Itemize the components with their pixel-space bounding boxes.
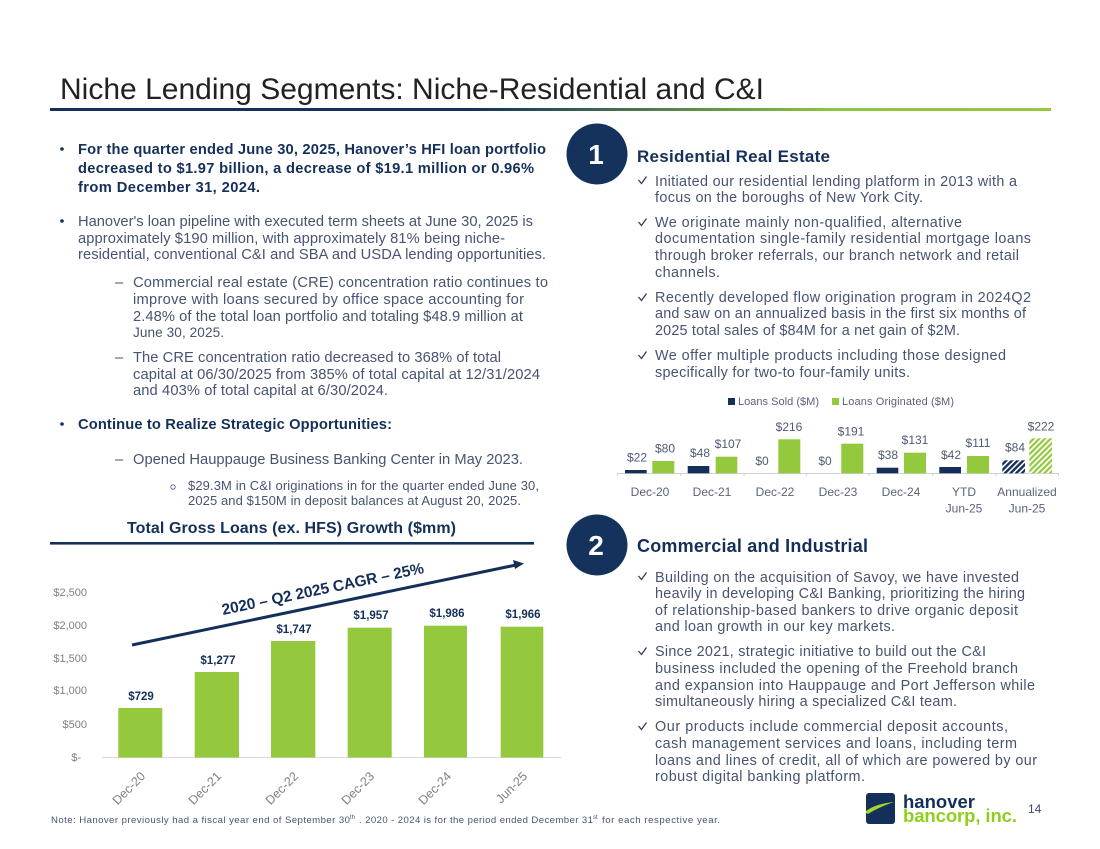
panel: left text bbox=[60, 142, 548, 508]
bar value labels: $216 bbox=[776, 420, 803, 434]
sub-bullet: CRE ratio: and 403% of total capital at 6/30/2024. bbox=[133, 383, 388, 399]
panel: commercial and industrial bbox=[566, 514, 1037, 785]
bar value labels: $38 bbox=[878, 448, 898, 462]
value labels: $1,277 bbox=[200, 655, 236, 667]
check item: products: We offer multiple products including those designed bbox=[655, 348, 1006, 364]
heading: Commercial and Industrial bbox=[637, 536, 868, 556]
check item: since 2021: Since 2021, strategic initiative to build out the C&I bbox=[655, 644, 986, 660]
check item: platform: Initiated our residential lending platform in 2013 with a bbox=[655, 174, 1017, 190]
check item: since 2021: and expansion into Hauppauge and Port Jefferson while bbox=[655, 678, 1035, 694]
sub-bullet: CRE ratio: The CRE concentration ratio decreased to 368% of total bbox=[133, 350, 501, 366]
sub-bullet: CRE office: June 30, 2025. bbox=[133, 325, 224, 340]
sub-bullet: CRE ratio bbox=[115, 350, 540, 399]
check item: platform: focus on the boroughs of New York City. bbox=[655, 190, 923, 206]
legend: Loans Sold ($M) bbox=[738, 396, 819, 408]
category labels bbox=[631, 485, 1057, 516]
check item: originate: channels. bbox=[655, 265, 720, 281]
sub-bullet: CRE office: 2.48% of the total loan portfolio and totaling $48.9 million at bbox=[133, 309, 523, 325]
sub-bullet: CRE office: – bbox=[115, 275, 124, 291]
y axis labels: $- bbox=[71, 752, 81, 764]
bar chart: loans sold and originated bbox=[617, 396, 1059, 516]
x axis labels: Jun-25 bbox=[493, 769, 530, 806]
bullet: strategic opportunities: Continue to Realize Strategic Opportunities: bbox=[78, 417, 392, 433]
category labels: Dec-22 bbox=[756, 485, 795, 499]
bar value labels: $222 bbox=[1028, 419, 1055, 433]
bar value labels: $0 bbox=[755, 454, 769, 468]
x axis labels: Dec-24 bbox=[416, 769, 454, 808]
sub-bullet: CRE office: Commercial real estate (CRE) concentration ratio continues to bbox=[133, 275, 548, 291]
y axis labels: $2,000 bbox=[53, 620, 87, 632]
category labels: Jun-25 bbox=[1009, 502, 1046, 516]
check item: products: Our products include commercial deposit accounts, bbox=[655, 719, 1008, 735]
check item: since 2021: business included the opening of the Freehold branch bbox=[655, 661, 1018, 677]
footnote: th bbox=[350, 815, 355, 821]
bar value labels: $191 bbox=[838, 425, 865, 439]
value labels: $1,747 bbox=[276, 624, 312, 636]
y axis labels: $1,500 bbox=[53, 653, 87, 665]
bullet: loan pipeline: approximately $190 million, with approximately 81% being niche- bbox=[78, 231, 505, 247]
loans originated bars bbox=[652, 438, 1052, 473]
x axis labels bbox=[110, 769, 530, 808]
footnote: . 2020 - 2024 is for the period ended December 31 bbox=[359, 815, 593, 826]
bullet: loan pipeline: Hanover's loan pipeline with executed term sheets at June 30, 2025 is bbox=[78, 214, 533, 230]
check item: flow origination bbox=[638, 290, 1031, 339]
legend: Loans Originated ($M) bbox=[842, 396, 954, 408]
sub-bullet: Hauppauge: Opened Hauppauge Business Banking Center in May 2023. bbox=[133, 452, 523, 468]
y axis labels: $500 bbox=[63, 719, 87, 731]
bullet: HFI loan portfolio: from December 31, 2024. bbox=[78, 180, 260, 196]
number badge 1 bbox=[566, 124, 628, 184]
bar value labels: $80 bbox=[655, 442, 675, 456]
check item: products: specifically for two-to four-family units. bbox=[655, 365, 910, 381]
bar chart: total gross loans bbox=[53, 560, 561, 808]
category labels: Dec-20 bbox=[631, 485, 670, 499]
logo: hanover bancorp: bancorp, inc. bbox=[903, 805, 1017, 826]
check item: Savoy: and loan growth in our key markets. bbox=[655, 619, 895, 635]
arrow: CAGR trend bbox=[132, 560, 524, 645]
check item: flow origination: 2025 total sales of $84M for a net gain of $2M. bbox=[655, 323, 960, 339]
number badge 2: 2 bbox=[588, 530, 604, 561]
check item: products: cash management services and loans, including term bbox=[655, 736, 1017, 752]
value labels: $729 bbox=[128, 691, 154, 703]
bar value labels: $84 bbox=[1005, 441, 1025, 455]
logo: hanover bancorp: hanover bbox=[903, 791, 975, 812]
bar value labels: $22 bbox=[627, 451, 647, 465]
x axis labels: Dec-21 bbox=[186, 769, 224, 808]
bar value labels: $131 bbox=[902, 433, 929, 447]
x axis labels: Dec-22 bbox=[263, 769, 301, 808]
check item: originate bbox=[638, 215, 1031, 281]
sub-bullet: Hauppauge: – bbox=[115, 452, 124, 468]
x axis labels: Dec-20 bbox=[110, 769, 148, 808]
footnote: for each respective year. bbox=[602, 815, 720, 826]
sub-sub-bullet: originations bbox=[171, 478, 539, 508]
check item: flow origination: Recently developed flow origination program in 2024Q2 bbox=[655, 290, 1031, 306]
check item: originate: documentation single-family residential mortgage loans bbox=[655, 231, 1031, 247]
check item: Savoy: of relationship-based bankers to drive organic deposit bbox=[655, 603, 1018, 619]
sub-bullet: CRE office: improve with loans secured by office space accounting for bbox=[133, 292, 524, 308]
number badge 2 bbox=[566, 514, 628, 576]
bar value labels: $0 bbox=[818, 454, 832, 468]
sub-bullet: CRE office bbox=[115, 275, 548, 340]
footnote: Note: Hanover previously had a fiscal year end of September 30 bbox=[51, 815, 350, 826]
value labels: $1,986 bbox=[429, 608, 465, 620]
x axis labels: Dec-23 bbox=[339, 769, 377, 808]
bullet: loan pipeline bbox=[60, 214, 546, 263]
category labels: Dec-21 bbox=[693, 485, 732, 499]
check item: originate: through broker referrals, our branch network and retail bbox=[655, 248, 1019, 264]
check item: products bbox=[638, 348, 1006, 381]
bar value labels bbox=[627, 419, 1055, 468]
bullet: loan pipeline: residential, conventional C&I and SBA and USDA lending opportunities. bbox=[78, 247, 546, 263]
number badge 1: 1 bbox=[588, 139, 604, 170]
bar value labels: $107 bbox=[715, 437, 742, 451]
title: Niche Lending Segments: Niche-Residential and C&I bbox=[60, 73, 764, 106]
bar value labels: $42 bbox=[941, 448, 961, 462]
bullet: HFI loan portfolio: For the quarter ended June 30, 2025, Hanover’s HFI loan portfolio bbox=[78, 142, 546, 158]
check item: Savoy: heavily in developing C&I Banking, prioritizing the hiring bbox=[655, 586, 1025, 602]
title rule bbox=[50, 108, 1051, 111]
check item: products bbox=[638, 719, 1037, 785]
check item: since 2021: simultaneously hiring a specialized C&I team. bbox=[655, 694, 957, 710]
bullet: HFI loan portfolio bbox=[60, 142, 546, 196]
heading: Residential Real Estate bbox=[637, 147, 830, 166]
bars bbox=[118, 626, 543, 758]
category labels: Dec-24 bbox=[882, 485, 921, 499]
check item: flow origination: and saw on an annualized basis in the first six months of bbox=[655, 306, 1027, 322]
y axis labels bbox=[53, 587, 87, 764]
check item: platform bbox=[638, 174, 1017, 206]
category labels: Annualized bbox=[997, 485, 1057, 499]
check item: Savoy: Building on the acquisition of Savoy, we have invested bbox=[655, 570, 1019, 586]
sub-bullet: CRE ratio: capital at 06/30/2025 from 385% of total capital at 12/31/2024 bbox=[133, 367, 540, 383]
y axis labels: $1,000 bbox=[53, 685, 87, 697]
sub-sub-bullet: originations: 2025 and $150M in deposit balances at August 20, 2025. bbox=[188, 493, 521, 508]
check item: products: robust digital banking platform. bbox=[655, 769, 865, 785]
footnote: st bbox=[593, 815, 598, 821]
panel: residential real estate bbox=[566, 124, 1031, 381]
category labels: Jun-25 bbox=[946, 502, 983, 516]
chart heading: total gross loans: Total Gross Loans (ex. HFS) Growth ($mm) bbox=[127, 520, 456, 537]
bullet: HFI loan portfolio: decreased to $1.97 billion, a decrease of $19.1 million or 0.96% bbox=[78, 161, 534, 177]
check item: originate: We originate mainly non-qualified, alternative bbox=[655, 215, 962, 231]
value labels: $1,957 bbox=[353, 610, 389, 622]
bar value labels: $48 bbox=[690, 446, 710, 460]
sub-bullet: CRE ratio: – bbox=[115, 350, 124, 366]
chart heading rule bbox=[50, 542, 534, 545]
legend bbox=[728, 396, 954, 408]
category labels: Dec-23 bbox=[819, 485, 858, 499]
category labels: YTD bbox=[952, 485, 976, 499]
check item: since 2021 bbox=[638, 644, 1035, 710]
value labels: $1,966 bbox=[505, 609, 541, 621]
page number: 14 bbox=[1028, 802, 1042, 816]
sub-sub-bullet: originations: $29.3M in C&I originations in for the quarter ended June 30, bbox=[188, 478, 539, 493]
logo: hanover bancorp bbox=[866, 791, 1017, 826]
value labels bbox=[128, 608, 541, 703]
loans sold bars bbox=[625, 460, 1025, 473]
check item: Savoy bbox=[638, 570, 1025, 635]
CAGR label: 2020 – Q2 2025 CAGR – 25% bbox=[220, 560, 426, 619]
check item: products: loans and lines of credit, all of which are powered by our bbox=[655, 753, 1037, 769]
y axis labels: $2,500 bbox=[53, 587, 87, 599]
footnote bbox=[51, 815, 720, 826]
bar value labels: $111 bbox=[966, 436, 991, 450]
